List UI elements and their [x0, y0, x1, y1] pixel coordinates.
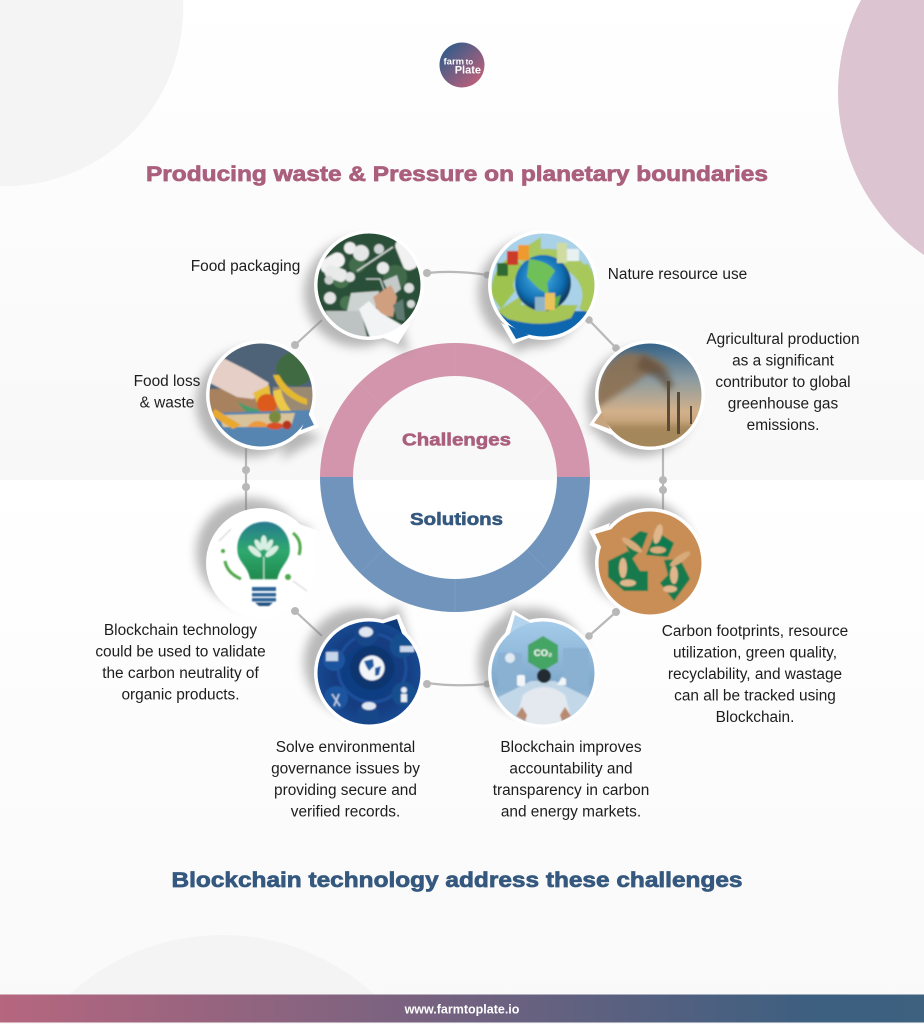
title: challenges heading: Producing waste & Pressure on planetary boundaries: [146, 163, 768, 186]
text: recycling tracking: Blockchain.: [716, 709, 794, 726]
bubble: nature resource use: [478, 230, 598, 353]
bubble: food loss and waste: [196, 340, 321, 460]
connectors between image bubbles: [242, 269, 667, 688]
ring bottom: solutions: [320, 477, 590, 612]
text: recycling tracking: can all be tracked using: [674, 688, 836, 704]
text: carbon markets: Blockchain improves: [500, 739, 642, 756]
text: recycling tracking: utilization, green quality,: [673, 644, 837, 662]
text: carbon neutrality: the carbon neutrality of: [102, 665, 260, 682]
text: carbon neutrality: organic products.: [121, 686, 240, 704]
text: greenhouse gas emissions: greenhouse gas: [728, 396, 838, 412]
text: carbon neutrality: Blockchain technology: [104, 622, 257, 639]
text: greenhouse gas emissions: contributor to global: [715, 374, 851, 391]
text: food loss and waste: Food loss: [134, 373, 200, 390]
logo: [440, 42, 484, 88]
label: Challenges: Challenges: [402, 430, 511, 450]
footer bar: www.farmtoplate.io: [404, 1002, 520, 1016]
bubble: carbon markets: [478, 605, 598, 728]
logo: Plate: [455, 64, 481, 76]
title: solutions heading: Blockchain technology address these challenges: [172, 869, 742, 892]
text: greenhouse gas emissions: emissions.: [747, 417, 819, 434]
text: environmental governance: verified records.: [291, 804, 400, 820]
text: nature resource use: Nature resource use: [608, 266, 747, 283]
text: carbon markets: accountability and: [509, 760, 633, 778]
text: recycling tracking: recyclability, and wastage: [668, 666, 842, 683]
bubble: food packaging: [304, 230, 424, 353]
logo: farmto: [444, 56, 473, 68]
text: environmental governance: governance issues by: [271, 760, 420, 778]
text: food loss and waste: & waste: [140, 394, 194, 412]
text: greenhouse gas emissions: Agricultural production: [706, 331, 860, 348]
text: recycling tracking: Carbon footprints, resource: [662, 623, 848, 640]
text: carbon neutrality: could be used to validate: [95, 644, 266, 660]
bubble: environmental governance: [304, 605, 424, 728]
bubble: greenhouse gas emissions: [587, 340, 705, 456]
ring top: challenges: [320, 343, 590, 478]
bubble: recycling: [585, 498, 705, 618]
bubble: green bulb: [196, 498, 318, 618]
label: Solutions: Solutions: [410, 509, 503, 529]
text: greenhouse gas emissions: as a significant: [732, 352, 835, 370]
text: carbon markets: and energy markets.: [501, 804, 641, 820]
bubble: carbon markets: CO₂: [534, 648, 552, 659]
text: environmental governance: providing secure and: [274, 782, 417, 799]
text: food packaging: Food packaging: [191, 258, 300, 275]
text: environmental governance: Solve environmental: [276, 739, 415, 756]
text: carbon markets: transparency in carbon: [493, 782, 649, 799]
center ring: [320, 343, 590, 612]
footer bar: [0, 994, 924, 1022]
